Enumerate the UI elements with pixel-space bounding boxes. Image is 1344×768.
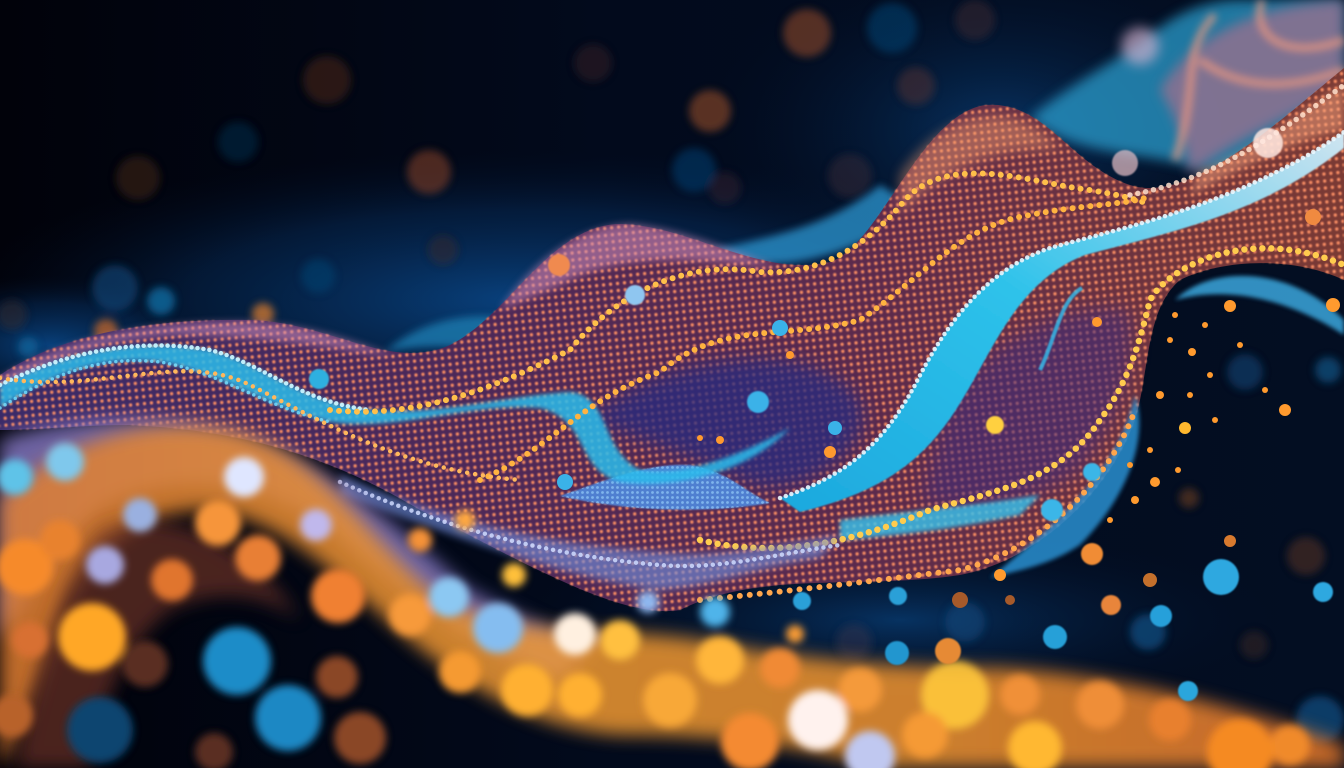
scattered orange sparks xyxy=(557,209,1340,608)
foreground orange blurred band xyxy=(0,426,1344,768)
foreground violet underlayer xyxy=(0,419,600,680)
back blue ribbons xyxy=(385,185,920,352)
cyan ribbon left xyxy=(0,345,790,484)
foreground bokeh dots xyxy=(0,443,1310,768)
dark blue hollow inside mesh xyxy=(560,308,1133,510)
cyan ribbon sweep xyxy=(780,132,1344,578)
dotted gold contour lines xyxy=(0,85,1344,600)
lower mesh edge ribbon xyxy=(340,475,840,590)
top right light blue wave xyxy=(1030,0,1344,175)
right side particles xyxy=(309,128,1333,701)
main mesh surface xyxy=(0,68,1344,611)
pink lilac crest xyxy=(500,224,780,310)
